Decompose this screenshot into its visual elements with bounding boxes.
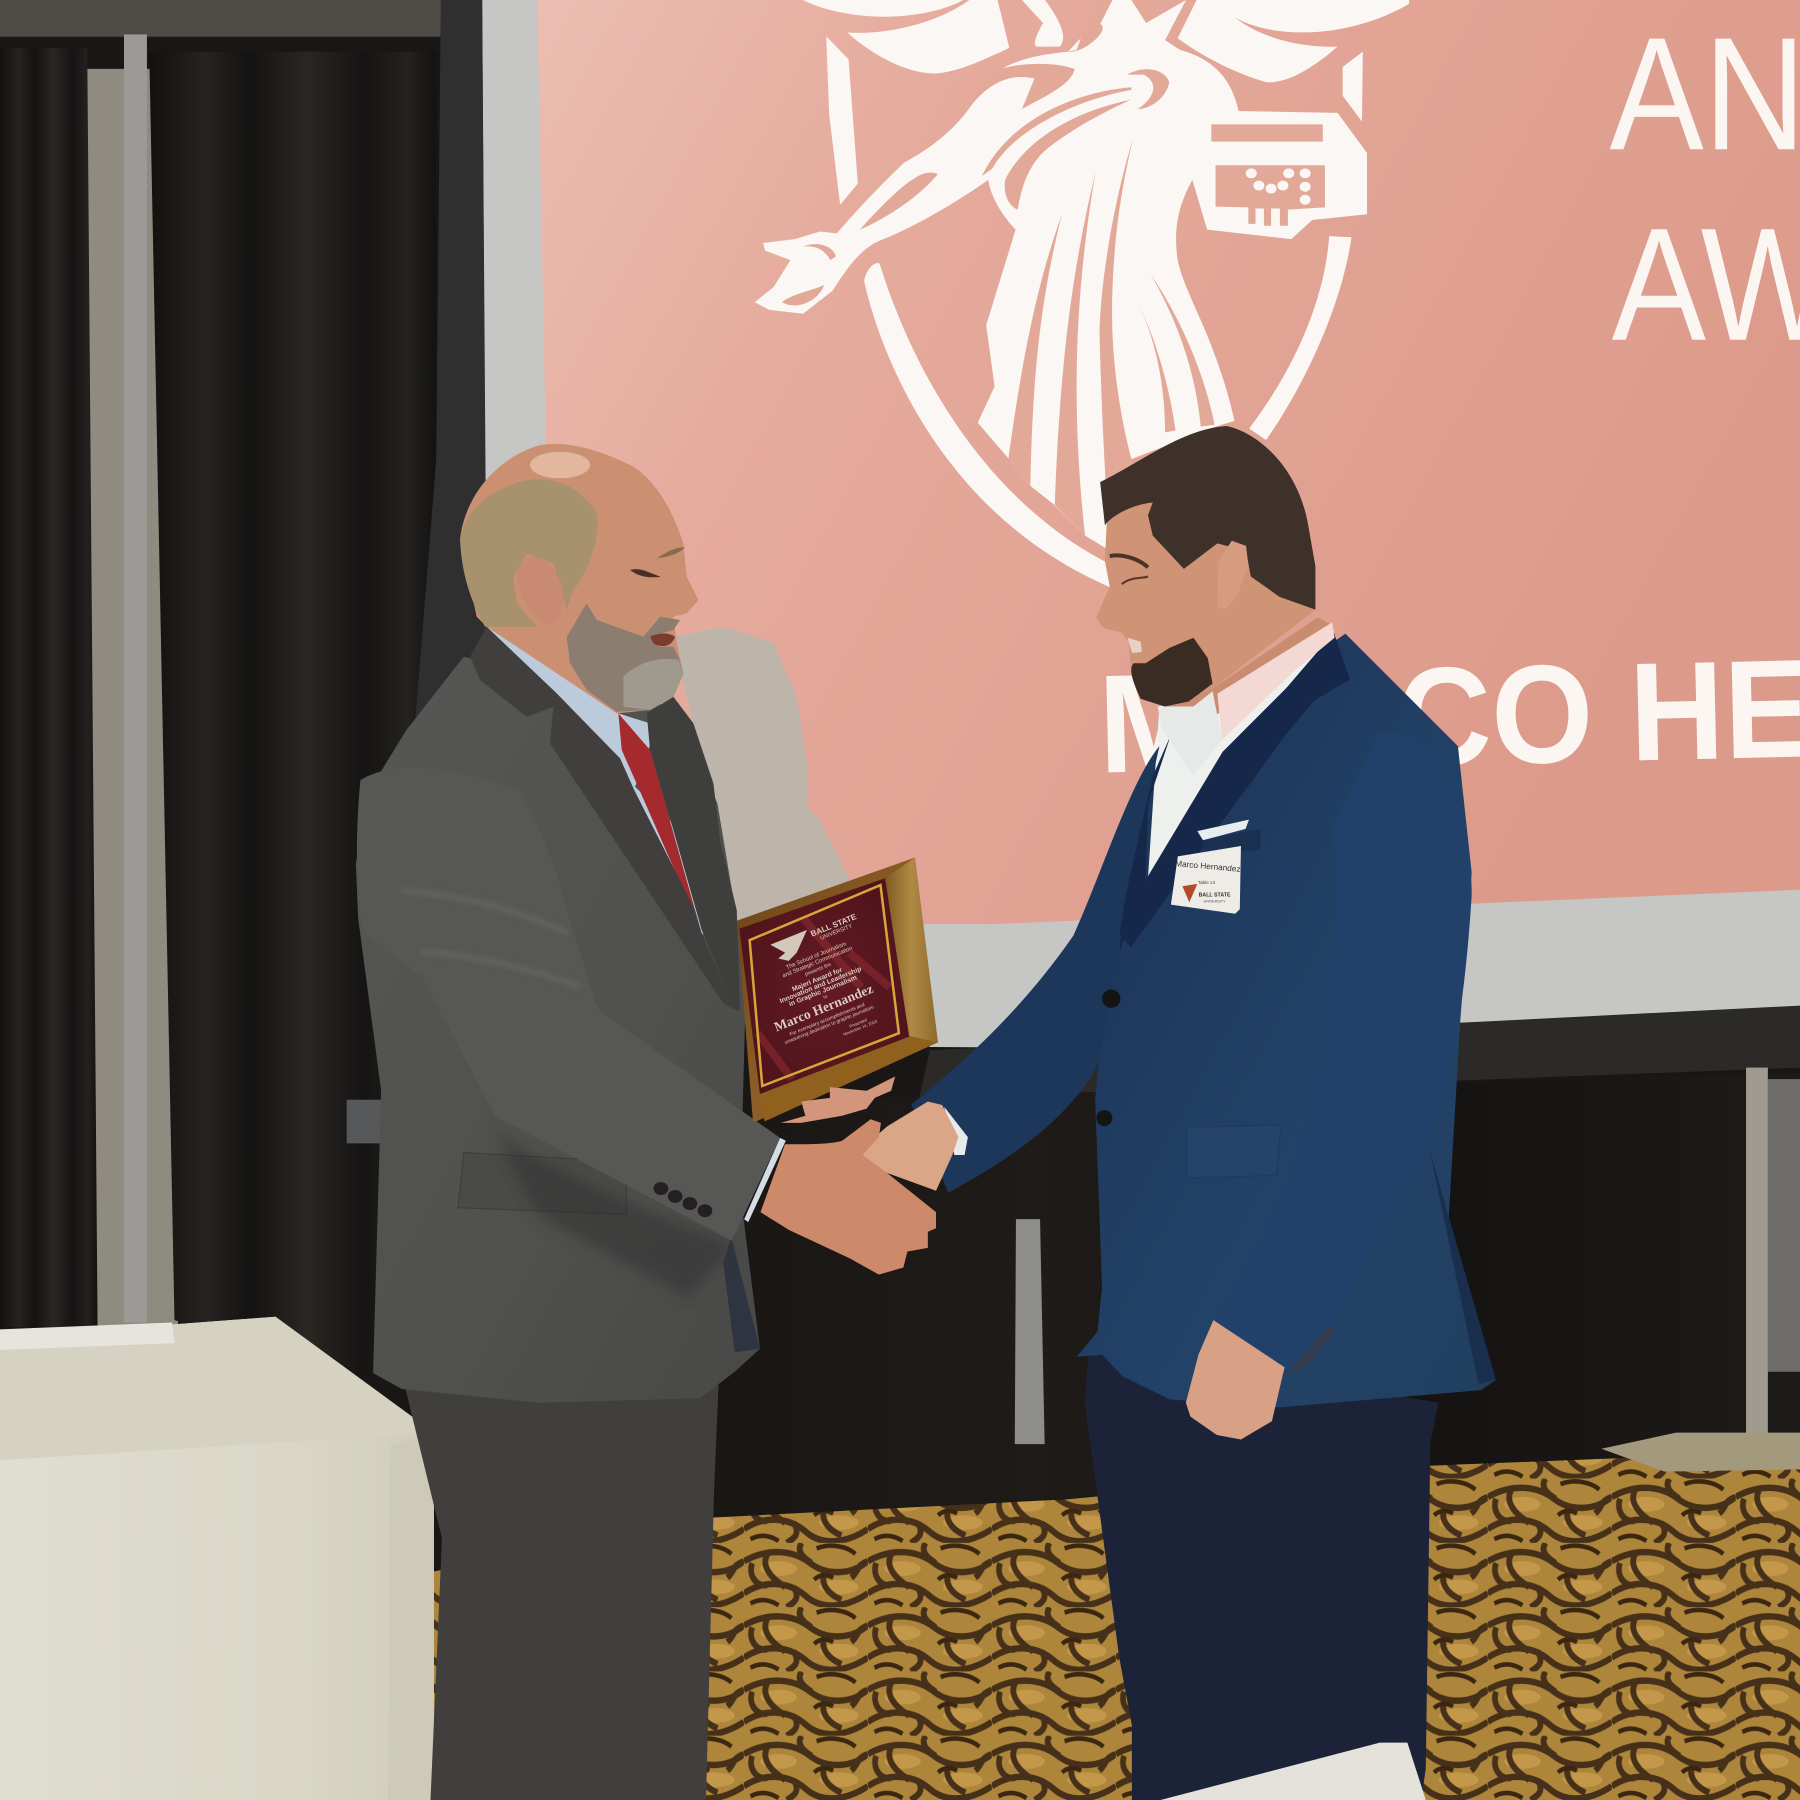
presenter shadow on screen (673, 627, 852, 924)
projection screen pink slide (537, 0, 1800, 924)
plaque engraved text: Presented (849, 1017, 868, 1029)
necktie (618, 713, 698, 927)
right lapel (647, 697, 740, 1010)
blazer right sleeve (1213, 732, 1472, 1371)
smile (1127, 638, 1142, 653)
trousers (1085, 1341, 1438, 1800)
inner jacket lining (723, 1238, 760, 1352)
neck (1165, 617, 1332, 714)
pole base plate (1601, 1433, 1800, 1472)
award logo on slide (755, 0, 1409, 587)
curtain: centre left (149, 52, 436, 1395)
handshake hands (760, 1076, 968, 1275)
table with cloth (0, 1317, 434, 1800)
right pole (1746, 1068, 1768, 1441)
hair (1100, 426, 1315, 610)
presenter fingers under plaque (781, 1076, 895, 1123)
jacket body (356, 657, 760, 1403)
jacket sleeve (357, 768, 786, 1241)
shirt cuff (744, 1138, 786, 1222)
eyebrow (1110, 555, 1148, 567)
centre curl (1022, 0, 1063, 47)
white shirt collar (1158, 691, 1222, 775)
badge logo mark (1182, 884, 1197, 902)
ear (1217, 541, 1248, 610)
hip pocket flap (1187, 1125, 1281, 1178)
papers on table (0, 1322, 174, 1350)
hip pocket flap (458, 1153, 627, 1215)
side hair (460, 479, 597, 627)
plaque engraved text: BALL STATE (809, 912, 858, 939)
curtain: far left (0, 48, 98, 1327)
closed eye (1122, 576, 1148, 584)
wall gap (1015, 1219, 1045, 1444)
slide text: ANNUAL AWARD (1609, 5, 1800, 375)
person: presenter in gray suit (347, 444, 786, 1800)
plaque engraved text: unwavering dedication to graphic journalism (784, 1005, 875, 1046)
plaque engraved text: Marco Hernandez (772, 981, 875, 1034)
chest pocket (1203, 829, 1260, 855)
name badge (1171, 846, 1241, 914)
plaque engraved text (746, 912, 897, 1060)
pink shirt collar (1217, 622, 1335, 740)
blazer back panel (1429, 1148, 1496, 1384)
person: recipient in navy blazer (911, 426, 1496, 1800)
plaque right bevel (885, 858, 938, 1042)
shirt front (1148, 626, 1336, 878)
blazer left sleeve (911, 746, 1159, 1193)
plaque gold border (750, 885, 899, 1086)
jacket back vent strap (347, 1100, 386, 1143)
stage bar under screen (918, 1006, 1800, 1102)
plaque engraved text: The School of Journalism (785, 941, 848, 971)
shield ring right (1249, 236, 1351, 440)
sleeve cuff buttons (1290, 1326, 1335, 1373)
right wall (1768, 1079, 1800, 1372)
upper left wing (803, 0, 963, 17)
back drape (712, 1073, 1800, 1518)
plaque burgundy face (739, 878, 909, 1094)
carpet floor (427, 1451, 1800, 1800)
beard chin gray (623, 659, 683, 710)
sleeve buttons (654, 1182, 712, 1217)
plaque wood frame (737, 858, 938, 1123)
blazer body (1077, 634, 1496, 1407)
left lapel (1119, 735, 1171, 953)
suit collar, tie and head (460, 444, 740, 1010)
sleeve fold highlight (401, 891, 581, 987)
name badge: Marco Hernandez (1175, 859, 1241, 874)
foreground white object (1161, 1743, 1426, 1800)
shield right tab (1343, 52, 1363, 122)
name badge: UNIVERSITY (1204, 899, 1226, 903)
blazer lapel (1116, 633, 1350, 947)
plaque engraved text: in Graphic Journalism (788, 974, 858, 1008)
beard (1131, 638, 1213, 707)
beard (567, 603, 683, 712)
projection screen frame (482, 0, 1800, 1050)
logo pink negative details (782, 0, 1325, 551)
plaque engraved text: and Strategic Communication (782, 946, 854, 979)
bald highlight (530, 452, 590, 478)
blazer buttons (1096, 990, 1120, 1126)
head and collar (1096, 426, 1335, 775)
trousers (404, 1383, 719, 1800)
dark screen frame (416, 0, 487, 717)
pocket square (1197, 820, 1249, 840)
plaque engraved text: UNIVERSITY (819, 923, 854, 942)
recipient hand (858, 1101, 958, 1191)
plaque eagle emblem (770, 930, 807, 961)
eye (630, 569, 661, 577)
mouth (650, 634, 675, 646)
lower left wing (847, 0, 1009, 73)
name badge: BALL STATE (1199, 893, 1231, 899)
lower hand (1186, 1320, 1285, 1440)
plaque (737, 858, 938, 1123)
jacket shadow under sleeve (494, 1131, 735, 1297)
plaque engraved text: November 14, 2023 (842, 1018, 878, 1037)
shirt (487, 627, 707, 937)
plaque engraved text: Majeri Award for (791, 967, 844, 993)
eyebrow (657, 547, 685, 558)
head skin (460, 444, 698, 713)
plaque engraved text: to (823, 993, 828, 1000)
name badge: Table 13 (1198, 880, 1216, 885)
recipient cuff (944, 1107, 968, 1155)
right wing (1178, 0, 1409, 82)
plaque red marbling (758, 918, 890, 1079)
face (1096, 459, 1315, 707)
plaque engraved text: Innovation and Leadership (779, 966, 863, 1005)
printing block dots (1243, 150, 1311, 205)
curtain pole (124, 34, 147, 1322)
shield left tab (826, 36, 858, 205)
shield ring left (864, 263, 1110, 587)
plaque engraved text: For exemplary accomplishments and (789, 1002, 866, 1038)
ear (517, 558, 563, 625)
left lapel (470, 627, 735, 1010)
plaque bottom bevel (760, 1035, 938, 1122)
figure body, arm and robe (755, 0, 1367, 551)
presenter hand (760, 1119, 936, 1275)
plaque engraved text: presents the (804, 962, 832, 978)
logo white silhouette (755, 0, 1409, 587)
